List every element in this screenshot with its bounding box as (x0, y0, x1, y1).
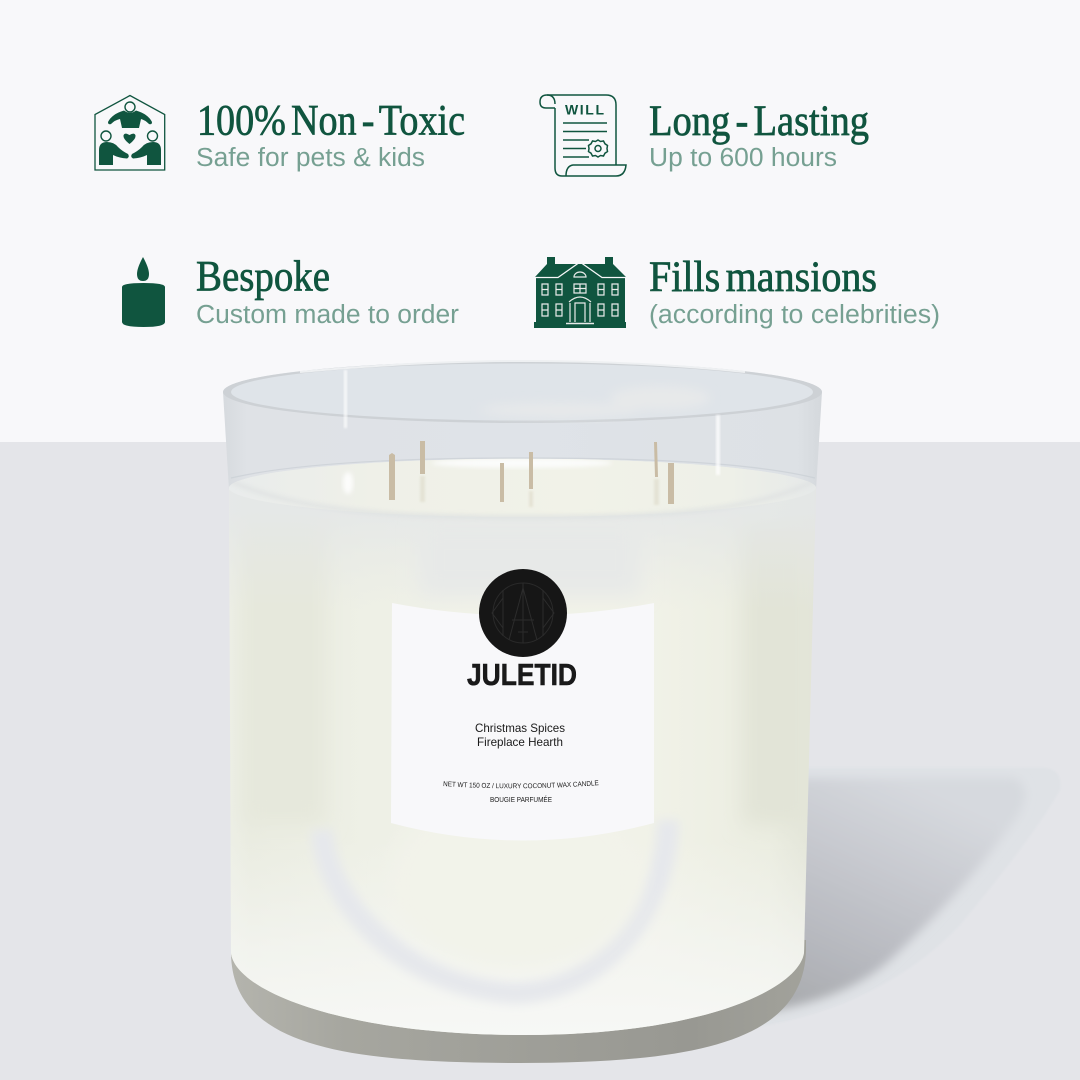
candle (223, 360, 822, 1063)
subheading: Up to 600 hours (649, 144, 837, 172)
product name: JULETID (467, 657, 577, 692)
icon: candle (122, 257, 165, 327)
cast shadow (740, 768, 1060, 1030)
scent notes: Fireplace Hearth (477, 735, 563, 749)
scent notes (475, 721, 565, 749)
glass jar upper wall (223, 361, 822, 490)
glass base (231, 940, 806, 1063)
wax seal (479, 569, 567, 657)
feature: fills mansions (534, 254, 940, 329)
icon: mansion (534, 257, 626, 328)
legal text (444, 780, 599, 804)
heading: 100% Non - Toxic (197, 98, 465, 144)
wax line through glass (231, 458, 815, 478)
wicks (389, 441, 674, 507)
scent notes: Christmas Spices (475, 721, 565, 735)
label (391, 569, 654, 840)
jar rim outer (223, 361, 822, 423)
label paper (391, 603, 654, 840)
icon: will scroll: WILL (565, 102, 604, 118)
heading: Bespoke (196, 254, 330, 300)
heading: Long - Lasting (649, 98, 869, 145)
legal text: BOUGIE PARFUMÉE (490, 795, 552, 804)
subheading: (according to celebrities) (649, 301, 940, 329)
background: upper panel (0, 0, 1080, 442)
jar rim top edge (300, 361, 745, 372)
legal text: NET WT 150 OZ / LUXURY COCONUT WAX CANDLE (444, 780, 599, 788)
feature: long-lasting (540, 95, 869, 176)
heading: Fills mansions (649, 254, 877, 301)
subheading: Custom made to order (196, 301, 460, 329)
wax top surface (334, 470, 734, 514)
icon: will scroll (540, 95, 626, 176)
wax body (220, 450, 830, 1050)
subheading: Safe for pets & kids (196, 144, 425, 172)
feature: bespoke (122, 254, 460, 329)
icon: family in house (95, 96, 165, 170)
jar interior back wall (231, 364, 813, 420)
background: lower surface (0, 442, 1080, 1080)
glass patches (480, 386, 710, 417)
feature: 100% non-toxic (95, 96, 465, 172)
glass highlights (343, 370, 720, 494)
